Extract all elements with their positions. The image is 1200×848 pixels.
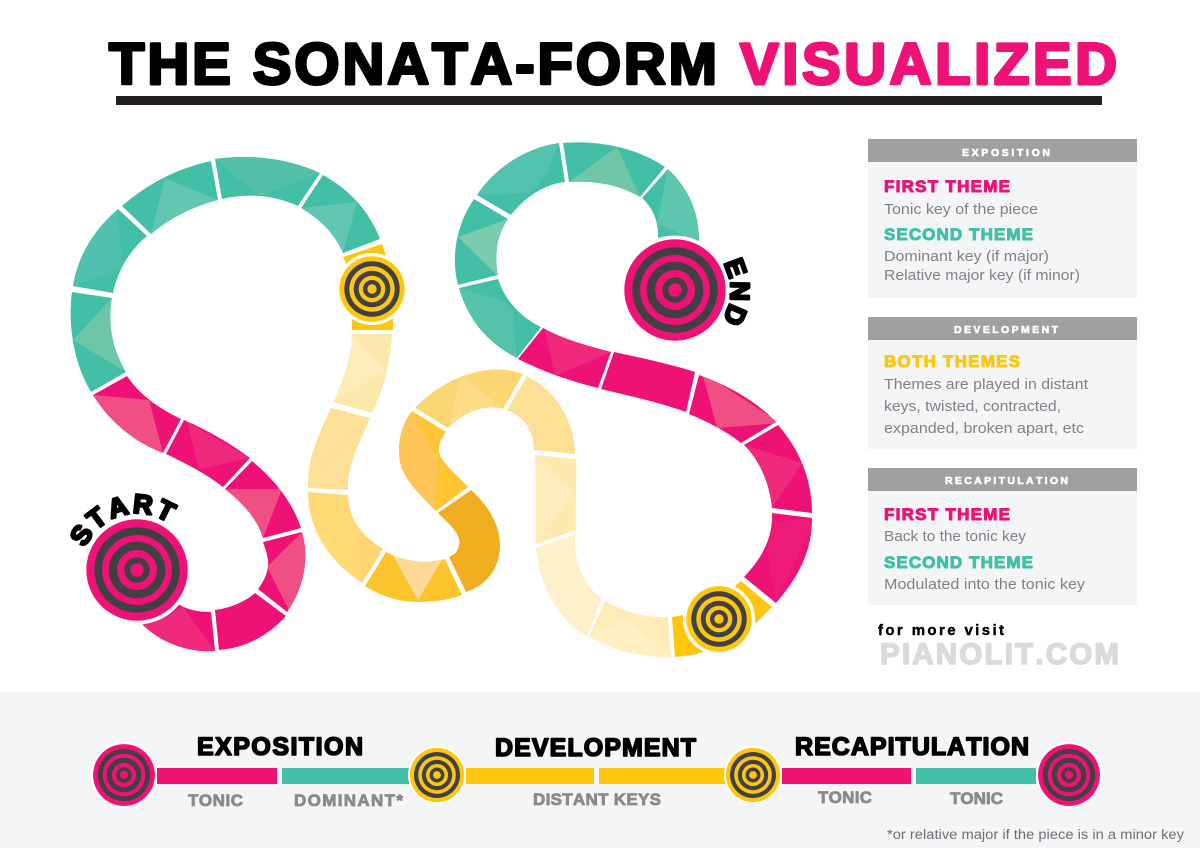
segment: yellow 10 xyxy=(536,534,602,637)
text: relative major key: Relative major key (if minor) xyxy=(884,268,1080,284)
segment: yellow 1 xyxy=(333,334,392,413)
theme heading: both themes: BOTH THEMES xyxy=(884,352,1020,371)
label: tonic: TONIC xyxy=(188,791,243,810)
segment: pink 6 xyxy=(93,376,181,453)
text: back to tonic: Back to the tonic key xyxy=(884,529,1027,545)
marker: timeline development xyxy=(408,746,466,804)
theme heading: second theme: SECOND THEME xyxy=(884,553,1033,572)
text: website: PIANOLIT.COM xyxy=(880,638,1119,671)
segment: yellow stub left of marker xyxy=(672,612,720,657)
label: exposition: EXPOSITION xyxy=(197,733,363,761)
panel heading: recapitulation: RECAPITULATION xyxy=(945,475,1068,487)
title xyxy=(109,32,1117,97)
segment: teal 7 xyxy=(455,199,508,285)
label: START: START xyxy=(70,493,178,546)
theme heading: first theme: FIRST THEME xyxy=(884,177,1010,196)
segment: yellow 7 xyxy=(415,370,523,428)
label: tonic recap second: TONIC xyxy=(950,789,1003,808)
segment: yellow 3 xyxy=(308,492,383,583)
theme heading: first theme: FIRST THEME xyxy=(884,505,1010,524)
label: END: END xyxy=(723,256,750,326)
segment: yellow 5 xyxy=(438,490,500,592)
panel: recapitulation xyxy=(868,468,1137,605)
segment: pink 4 xyxy=(225,461,301,538)
path: recapitulation, teal segments xyxy=(455,142,705,358)
bar: development 1 xyxy=(466,768,594,784)
text: for more visit: for more visit xyxy=(878,622,1004,639)
segment: yellow stub below marker xyxy=(352,315,393,330)
bar: exposition dominant xyxy=(282,768,409,784)
segment: yellow 6 xyxy=(395,410,468,512)
segment: pink 11 xyxy=(518,328,611,388)
path: first exposition, teal dominant segments xyxy=(60,145,380,392)
segment: teal 6 xyxy=(459,279,541,358)
label: distant keys: DISTANT KEYS xyxy=(533,790,661,809)
title: VISUALIZED xyxy=(740,32,1117,97)
bar: exposition tonic xyxy=(157,768,277,784)
panel: timeline summary xyxy=(0,692,1200,848)
segment: yellow 8 xyxy=(507,376,575,454)
theme heading: second theme: SECOND THEME xyxy=(884,225,1033,244)
path: development, yellow segments xyxy=(308,244,772,657)
segment: teal 9 xyxy=(563,142,665,197)
bar: recapitulation second xyxy=(916,768,1036,784)
segment: teal 4 xyxy=(215,157,320,206)
text: development line 2: keys, twisted, contracted, xyxy=(884,399,1061,415)
marker: recapitulation start target xyxy=(683,583,755,655)
segment: yellow 4 xyxy=(365,550,462,602)
segment: pink 10 xyxy=(601,352,695,412)
bar: development 2 xyxy=(599,768,726,784)
marker: end target xyxy=(620,236,730,344)
segment: pink 5 xyxy=(166,420,250,487)
segment: pink 9 xyxy=(689,372,780,443)
marker: development start target xyxy=(336,253,408,325)
text: development line 3: expanded, broken apart, etc xyxy=(884,421,1084,437)
segment: yellow 9 xyxy=(535,455,576,544)
marker: timeline start xyxy=(91,742,157,808)
path: recapitulation, pink tonic segments xyxy=(518,328,815,603)
segment: pink 2 xyxy=(215,593,286,650)
segment: yellow stub right of marker xyxy=(730,581,772,623)
segment: pink 3 xyxy=(258,532,306,612)
segment: yellow stub above marker xyxy=(343,244,388,272)
marker: start target xyxy=(82,516,192,624)
segment: teal 8 xyxy=(477,143,565,215)
bar: recapitulation tonic xyxy=(782,768,911,784)
segment: pink 1 xyxy=(143,604,215,652)
segment: pink 7 xyxy=(744,513,815,603)
text: development line 1: Themes are played in distant xyxy=(884,377,1088,393)
text: dominant key: Dominant key (if major) xyxy=(884,249,1049,265)
text: modulated: Modulated into the tonic key xyxy=(884,577,1086,593)
label: dominant: DOMINANT* xyxy=(294,791,403,810)
panel heading: development: DEVELOPMENT xyxy=(954,324,1059,336)
segment: teal 3 xyxy=(122,161,218,234)
panel: exposition xyxy=(868,139,1137,298)
label: development: DEVELOPMENT xyxy=(495,734,696,762)
panel: development xyxy=(868,317,1137,449)
path: first exposition, pink tonic segments xyxy=(93,376,306,652)
segment: pink 8 xyxy=(744,425,812,513)
marker: timeline end xyxy=(1036,742,1102,808)
segment: yellow 2 xyxy=(308,408,370,490)
text: tonic key: Tonic key of the piece xyxy=(884,202,1038,218)
segment: yellow 11 xyxy=(589,601,671,657)
segment: teal 1 xyxy=(71,292,126,392)
label: tonic recap first: TONIC xyxy=(818,788,872,807)
footnote: *or relative major if the piece is in a minor key xyxy=(887,827,1184,842)
segment: teal 2 xyxy=(73,209,147,293)
title underline xyxy=(116,96,1102,105)
segment: teal 10 xyxy=(642,169,699,242)
title: THE SONATA-FORM xyxy=(109,32,717,97)
marker: timeline recapitulation xyxy=(724,746,782,804)
panel heading: exposition: EXPOSITION xyxy=(962,147,1050,159)
label: recapitulation: RECAPITULATION xyxy=(795,733,1029,761)
segment: teal 5 xyxy=(301,175,380,253)
